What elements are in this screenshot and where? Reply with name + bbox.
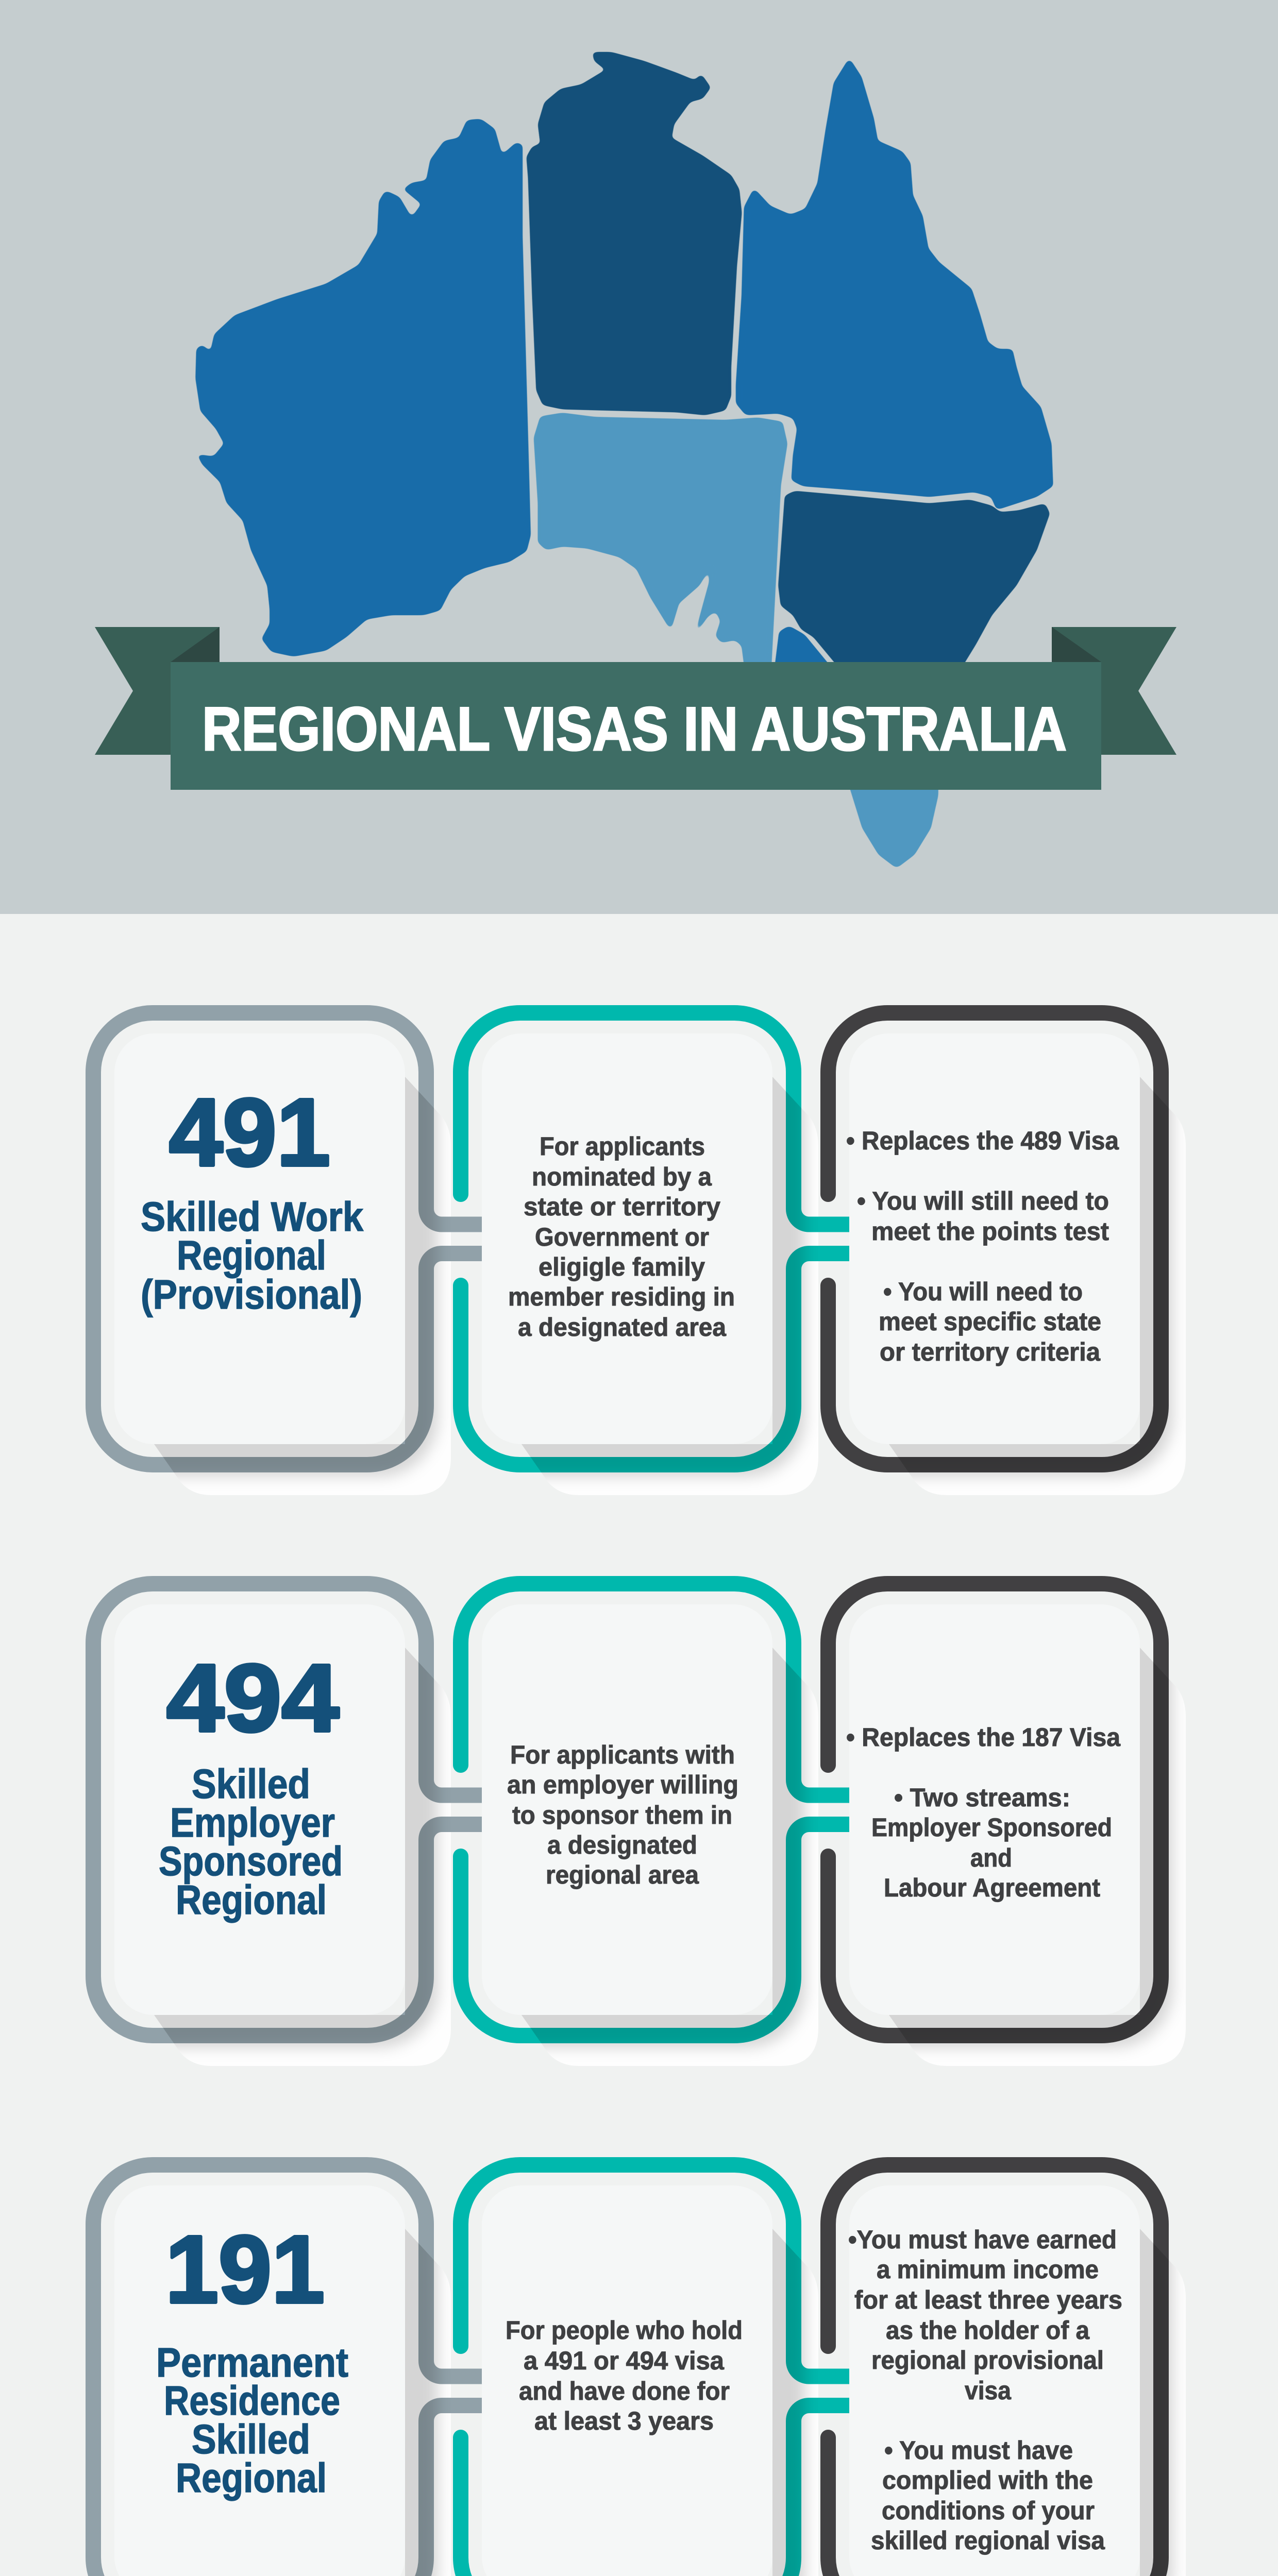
visa name 494: Regional — [176, 1877, 327, 1923]
ribbon right fold — [1052, 627, 1101, 662]
requirements text 191: for at least three years — [854, 2285, 1122, 2314]
requirements text 191: •You must have earned — [848, 2225, 1117, 2254]
visa name 491: Regional — [177, 1232, 326, 1278]
requirements text 491: meet the points test — [871, 1217, 1109, 1246]
requirements text 491: • You will need to — [883, 1277, 1083, 1306]
card: 191 name — [93, 2165, 482, 2576]
map region: Western Australia — [196, 119, 531, 656]
visa name 494: Sponsored — [159, 1838, 343, 1884]
card: 494 requirements — [828, 1584, 1186, 2066]
visa name 494: Employer — [170, 1800, 335, 1845]
requirements text 191: conditions of your — [882, 2496, 1095, 2525]
description text 494: For applicants with — [510, 1740, 735, 1769]
requirements text 494: Employer Sponsored — [871, 1813, 1112, 1842]
map region: South Australia — [534, 413, 787, 671]
requirements text 191: a minimum income — [877, 2255, 1099, 2284]
requirements text 494: • Two streams: — [894, 1783, 1070, 1812]
ribbon banner — [95, 627, 1176, 790]
visa number 191: 191 — [165, 2216, 325, 2323]
visa name 491 — [141, 1194, 363, 1317]
map region: Northern Territory — [527, 52, 742, 415]
map region: Victoria — [775, 626, 835, 671]
requirements text 491: • Replaces the 489 Visa — [846, 1126, 1119, 1155]
requirements text 491: meet specific state — [879, 1307, 1101, 1336]
description text 491: a designated area — [518, 1313, 727, 1342]
ribbon left tail — [95, 627, 220, 755]
row: visa 494 — [93, 1584, 1186, 2066]
card: 491 requirements — [828, 1013, 1186, 1495]
description text 191: at least 3 years — [534, 2406, 714, 2435]
requirements text 494: Labour Agreement — [884, 1873, 1100, 1902]
card: 491 description — [461, 1013, 850, 1495]
visa name 491: Skilled Work — [141, 1194, 363, 1240]
description text 494: an employer willing — [507, 1770, 738, 1799]
visa name 494: Skilled — [192, 1761, 310, 1807]
visa name 191: Regional — [176, 2455, 327, 2501]
requirements text 191 — [848, 2225, 1122, 2555]
requirements text 491 — [846, 1126, 1119, 1366]
requirements text 191: as the holder of a — [886, 2316, 1090, 2345]
requirements text 494: and — [970, 1843, 1012, 1872]
description text 191: For people who hold — [506, 2316, 743, 2345]
description text 191: a 491 or 494 visa — [524, 2346, 725, 2375]
description text 491: member residing in — [508, 1282, 735, 1311]
visa name 191: Permanent — [156, 2340, 348, 2385]
map region: New South Wales — [778, 491, 1050, 671]
visa name 191 — [156, 2340, 348, 2501]
description text 491: eligigle family — [539, 1252, 705, 1281]
card: 491 name — [93, 1013, 482, 1495]
visa name 191: Skilled — [192, 2416, 310, 2462]
requirements text 491: • You will still need to — [857, 1187, 1109, 1215]
requirements text 491: or territory criteria — [880, 1337, 1101, 1366]
visa name 491: (Provisional) — [141, 1272, 362, 1317]
description text 491: For applicants — [540, 1132, 705, 1161]
description text 491: nominated by a — [532, 1162, 712, 1191]
card: 191 requirements — [828, 2165, 1186, 2576]
requirements text 494: • Replaces the 187 Visa — [846, 1723, 1121, 1752]
requirements text 494 — [846, 1723, 1121, 1902]
description text 494: a designated — [547, 1831, 697, 1859]
description text 494 — [507, 1740, 738, 1889]
description text 191 — [506, 2316, 743, 2435]
ribbon right tail — [1052, 627, 1176, 755]
row: visa 491 — [93, 1013, 1186, 1495]
visa name 191: Residence — [164, 2378, 340, 2424]
visa number 494: 494 — [166, 1645, 339, 1752]
description text 491 — [508, 1132, 735, 1342]
description text 491: state or territory — [524, 1192, 720, 1221]
requirements text 191: skilled regional visa — [871, 2526, 1105, 2555]
description text 494: to sponsor them in — [512, 1801, 732, 1829]
visa name 494 — [159, 1761, 343, 1923]
card: 494 name — [93, 1584, 482, 2066]
map region: Tasmania — [848, 781, 938, 868]
map region: Queensland — [736, 58, 1053, 510]
row: visa 191 — [93, 2165, 1186, 2576]
ribbon left fold — [171, 627, 220, 662]
card: 191 description — [461, 2165, 850, 2576]
description text 494: regional area — [546, 1860, 699, 1889]
card: 494 description — [461, 1584, 850, 2066]
map of Australia — [196, 52, 1053, 868]
header panel — [0, 0, 1278, 914]
description text 491: Government or — [535, 1223, 709, 1251]
requirements text 191: visa — [965, 2376, 1012, 2405]
visa number 491: 491 — [169, 1079, 330, 1186]
requirements text 191: complied with the — [882, 2466, 1093, 2495]
requirements text 191: regional provisional — [871, 2346, 1104, 2375]
description text 191: and have done for — [519, 2377, 730, 2405]
ribbon band — [171, 662, 1101, 790]
requirements text 191: • You must have — [884, 2436, 1073, 2465]
title: REGIONAL VISAS IN AUSTRALIA — [202, 694, 1067, 764]
